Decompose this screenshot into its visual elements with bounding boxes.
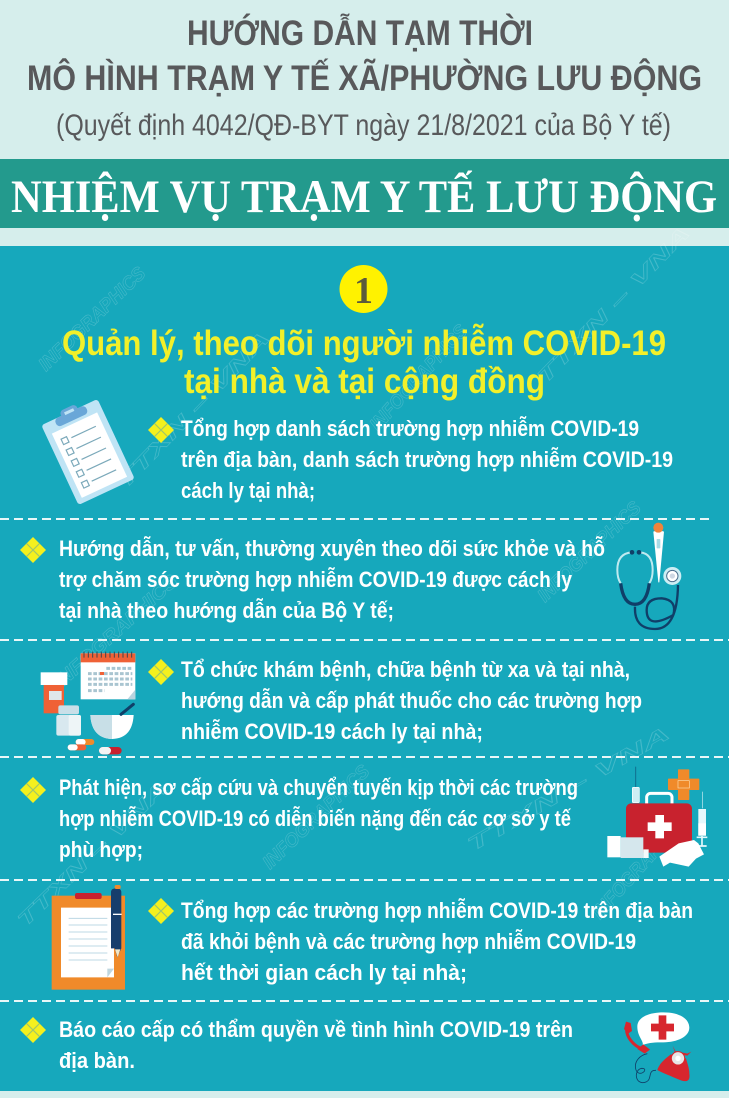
- icon: clipboard checklist: [39, 394, 135, 505]
- task 4: text: [20, 775, 578, 862]
- number badge: 1: [354, 270, 373, 312]
- task 5: text: hết thời gian cách ly tại nhà;: [181, 960, 467, 985]
- dashed dividers: [0, 519, 729, 1001]
- task 1: text: Tổng hợp danh sách trường hợp nhiễm COVID-19: [181, 416, 639, 441]
- watermarks: TTXN – VNA: [14, 778, 172, 932]
- task 3: text: Tổ chức khám bệnh, chữa bệnh từ xa và tại nhà,: [181, 657, 630, 682]
- watermarks: INFOGRAPHICS: [366, 321, 472, 435]
- watermarks: TTXN – VNA: [113, 328, 274, 493]
- task 2: text: tại nhà theo hướng dẫn của Bộ Y tế;: [59, 598, 394, 623]
- main teal panel: [0, 246, 729, 1091]
- task 2: text: Hướng dẫn, tư vấn, thường xuyên theo dõi sức khỏe và hỗ: [59, 536, 605, 561]
- task 3: text: hướng dẫn và cấp phát thuốc cho các trường hợp: [181, 688, 642, 713]
- task 1: text: cách ly tại nhà;: [181, 478, 315, 503]
- task 5: text: đã khỏi bệnh và các trường hợp nhiễm COVID-19: [181, 929, 636, 954]
- watermarks: INFOGRAPHICS: [588, 809, 694, 923]
- task 4: text: hợp nhiễm COVID-19 có diễn biến nặng đến các cơ sở y tế: [59, 806, 572, 831]
- task 6: text: [20, 1017, 573, 1073]
- task 3: text: nhiễm COVID-19 cách ly tại nhà;: [181, 719, 483, 744]
- header: document title: [27, 13, 702, 142]
- task 6: text: Báo cáo cấp có thẩm quyền về tình hình COVID-19 trên: [59, 1017, 573, 1042]
- watermarks: INFOGRAPHICS: [259, 761, 374, 874]
- watermarks: TTXN – VNA: [533, 223, 694, 388]
- icon: orange clipboard with pen: [52, 885, 125, 990]
- task 4: text: phù hợp;: [59, 837, 143, 862]
- icon: emergency telephone: [624, 1012, 691, 1083]
- task 1: text: [148, 416, 673, 503]
- task 2: text: [20, 536, 605, 623]
- watermarks: TTXN – VNA: [464, 723, 674, 856]
- watermarks: [14, 223, 694, 932]
- task 6: text: địa bàn.: [59, 1048, 135, 1073]
- task 1: text: trên địa bàn, danh sách trường hợp nhiễm COVID-19: [181, 447, 673, 472]
- section heading: tại nhà và tại cộng đồng: [184, 362, 545, 401]
- section heading: [62, 323, 666, 401]
- task 5: text: [148, 898, 693, 985]
- section heading: Quản lý, theo dõi người nhiễm COVID-19: [62, 323, 666, 363]
- task 3: text: [148, 657, 642, 744]
- watermarks: INFOGRAPHICS: [35, 263, 150, 376]
- task 2: text: trợ chăm sóc trường hợp nhiễm COVID-19 được cách ly: [59, 567, 573, 592]
- number badge: [340, 265, 388, 313]
- icon: first aid kit: [607, 767, 707, 867]
- icon: stethoscope and thermometer: [617, 523, 681, 629]
- icon: medicine and calendar: [41, 652, 135, 754]
- header: document title: HƯỚNG DẪN TẠM THỜI: [187, 13, 533, 53]
- watermarks: INFOGRAPHICS: [534, 498, 646, 607]
- task 4: text: Phát hiện, sơ cấp cứu và chuyển tuyến kịp thời các trường: [59, 775, 578, 800]
- watermarks: INFOGRAPHICS: [49, 571, 183, 694]
